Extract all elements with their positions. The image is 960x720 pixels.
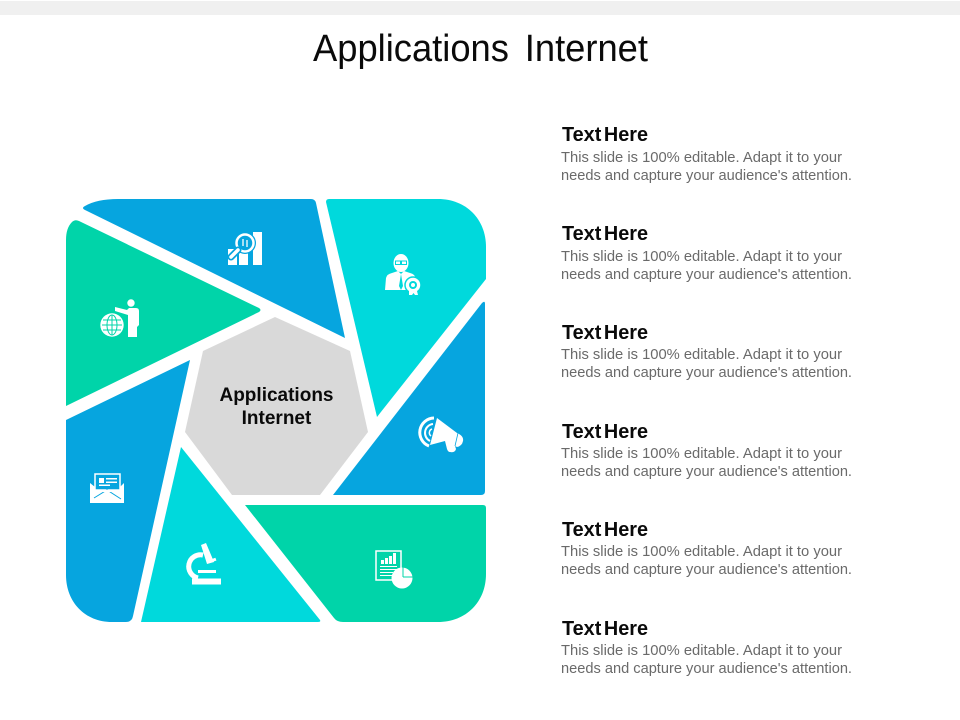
text block 4 — [561, 421, 852, 480]
icon: megaphone — [420, 418, 463, 452]
text block 5 — [561, 519, 852, 578]
text block 3 — [561, 322, 852, 381]
text block 2: needs and capture your audience's attention. — [561, 267, 852, 283]
text block 3: This slide is 100% editable. Adapt it to your — [561, 347, 842, 363]
panel: left blue segment — [66, 360, 190, 622]
text block 2 — [561, 223, 852, 283]
icon: magnifier over bar chart — [228, 232, 262, 265]
centre label: Applications — [219, 385, 334, 406]
text block 2: This slide is 100% editable. Adapt it to your — [561, 249, 842, 265]
text block 5: This slide is 100% editable. Adapt it to your — [561, 544, 842, 560]
text block 3: Text Here — [562, 322, 648, 344]
centre label line 2: Internet — [242, 408, 312, 429]
icon: report with pie chart — [376, 551, 413, 588]
text block 6 — [561, 618, 852, 677]
icon: microscope — [189, 543, 221, 584]
icon: open envelope with card — [90, 474, 124, 503]
panel: bottom teal segment — [141, 447, 320, 622]
panel: right blue segment — [333, 302, 485, 495]
text block 1: needs and capture your audience's attention. — [561, 168, 852, 184]
top grey band — [0, 1, 960, 15]
text block 4: Text Here — [562, 421, 648, 443]
panel: top blue segment — [83, 199, 345, 338]
panel: top right teal segment — [326, 199, 486, 417]
text block 3: needs and capture your audience's attention. — [561, 365, 852, 381]
text block 5: needs and capture your audience's attention. — [561, 562, 852, 578]
panel: left green segment — [66, 220, 260, 406]
text block 1 — [561, 124, 852, 184]
title: Applications Internet — [313, 28, 648, 70]
panel: bottom green segment — [245, 505, 486, 622]
text block 6: This slide is 100% editable. Adapt it to your — [561, 643, 842, 659]
icon: person with globe — [100, 299, 139, 337]
text block 4: This slide is 100% editable. Adapt it to your — [561, 446, 842, 462]
icon: businessman with rosette — [385, 254, 421, 295]
diagram: shutter square — [66, 199, 486, 622]
text block 5: Text Here — [562, 519, 648, 541]
text block 1: Text Here — [562, 124, 648, 146]
text block 6: Text Here — [562, 618, 648, 640]
text block 1: This slide is 100% editable. Adapt it to your — [561, 150, 842, 166]
text block 6: needs and capture your audience's attention. — [561, 661, 852, 677]
text block 2: Text Here — [562, 223, 648, 245]
text block 4: needs and capture your audience's attention. — [561, 464, 852, 480]
panel: centre heptagon — [185, 317, 368, 495]
